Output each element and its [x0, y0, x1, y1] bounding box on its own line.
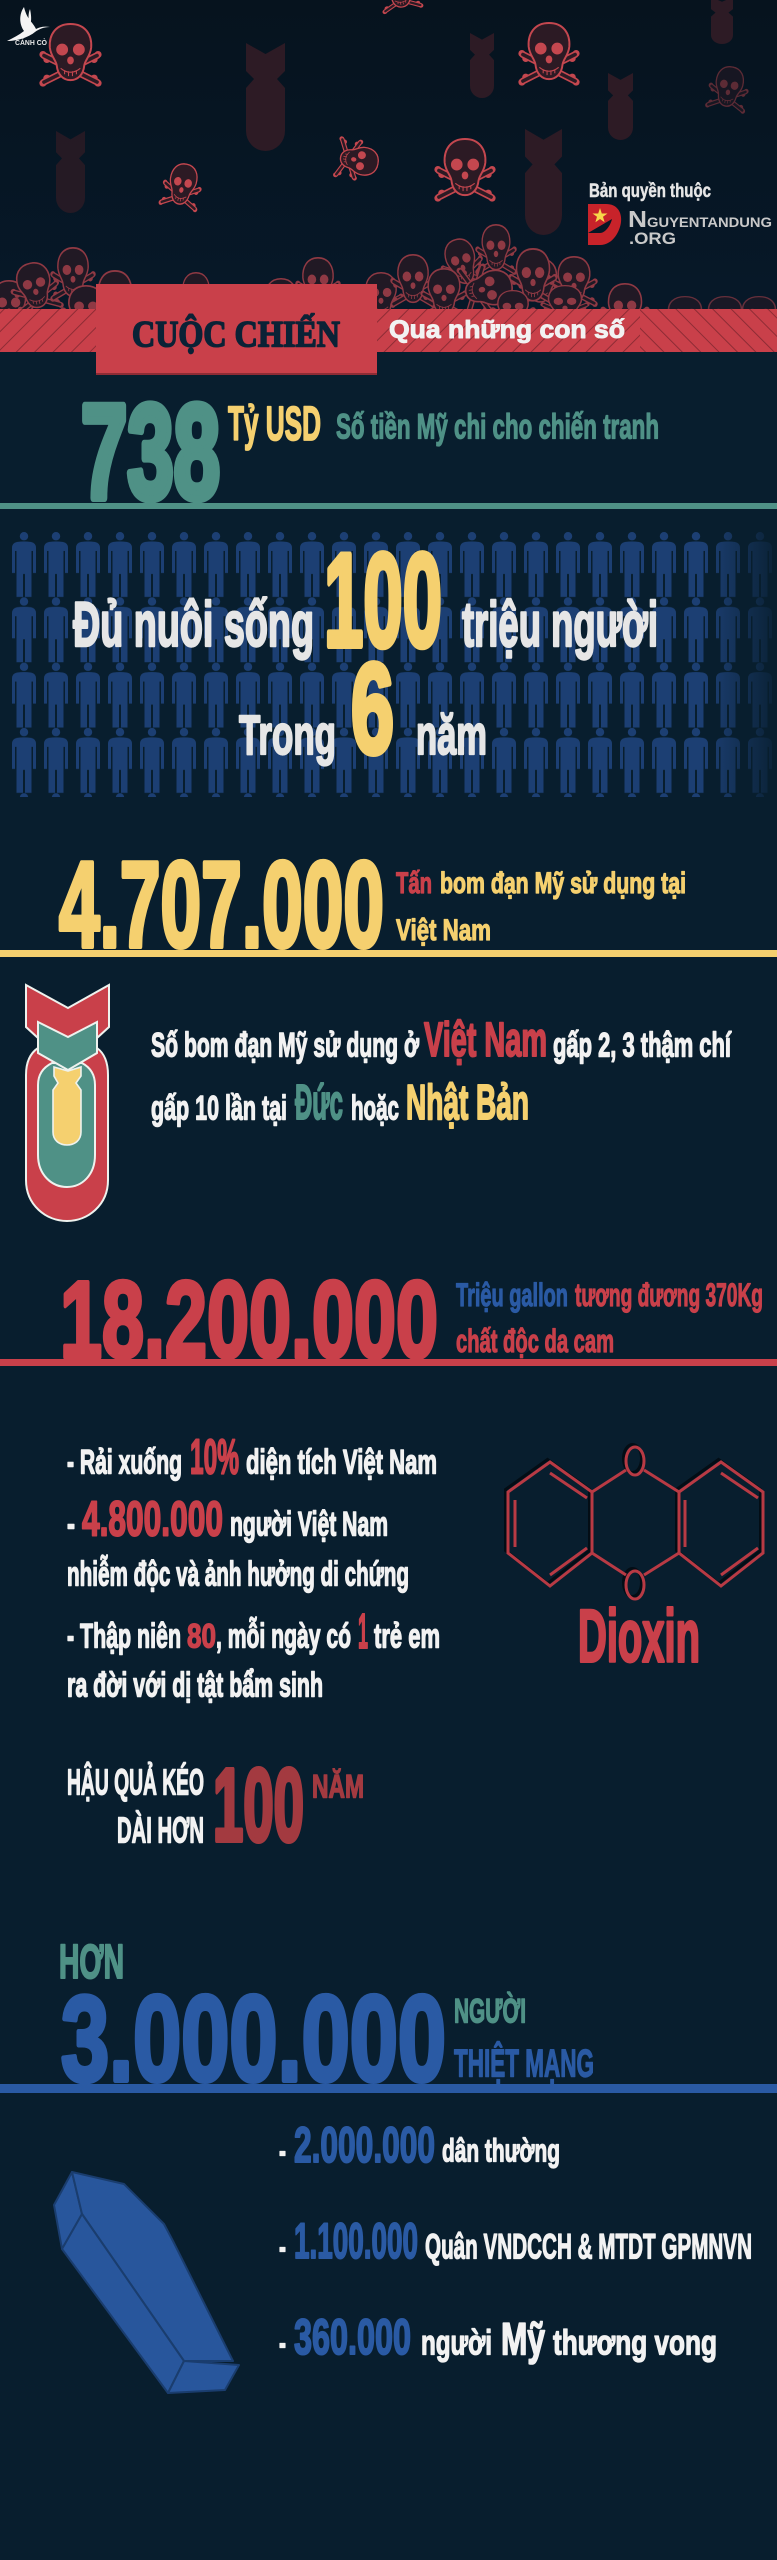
big number: 4.707.000 — [59, 836, 384, 972]
description: chất độc da cam — [456, 1323, 614, 1359]
text: Agent Orange effects: - Thập niên — [67, 1618, 181, 1656]
icon: red D logo with star — [588, 204, 621, 245]
icon: falling bombs — [56, 0, 733, 235]
big number: 18.200.000 — [60, 1259, 438, 1381]
unit: NGƯỜI — [454, 1992, 526, 2030]
site name — [628, 206, 772, 248]
item: civilians: 2.000.000 — [294, 2117, 435, 2173]
Cánh Cò logo — [7, 7, 50, 47]
text line 2 — [239, 638, 487, 781]
description: Triệu gallon — [456, 1277, 568, 1313]
callout: consequences last over 100 years: NĂM — [312, 1768, 364, 1804]
stat: 18,200,000 gallons — [0, 1259, 777, 1381]
text: Agent Orange effects: ra đời với dị tật bẩm sinh — [67, 1666, 323, 1704]
description: bom đạn Mỹ sử dụng tại — [440, 867, 686, 900]
callout: consequences last over 100 years: DÀI HƠN — [117, 1810, 204, 1850]
text line 2: năm — [416, 703, 487, 766]
item: Americans: 360.000 — [294, 2309, 411, 2365]
text: comparison with Germany and Japan: hoặc — [351, 1090, 399, 1128]
text line 1 — [73, 527, 658, 675]
text: comparison with Germany and Japan: Việt Nam — [424, 1014, 547, 1067]
icon: pile of skulls — [0, 224, 776, 309]
site name: N — [628, 206, 647, 232]
text: Agent Orange effects: nhiễm độc và ảnh hưởng di chứng — [67, 1556, 409, 1594]
yellow rule — [0, 950, 777, 957]
text: comparison with Germany and Japan: Số bom đạn Mỹ sử dụng ở — [151, 1026, 420, 1064]
text: Agent Orange effects: - Rải xuống — [67, 1444, 182, 1482]
title box — [96, 284, 377, 375]
red rule — [0, 1359, 777, 1366]
text: comparison with Germany and Japan — [151, 1014, 732, 1130]
stat: 738 billion USD — [0, 378, 777, 527]
teal rule — [0, 503, 777, 509]
text: Agent Orange effects: diện tích Việt Nam — [246, 1444, 437, 1482]
callout: consequences last over 100 years: 100 — [213, 1748, 304, 1862]
item: soldiers — [279, 2213, 752, 2269]
text: Agent Orange effects: 80 — [187, 1618, 216, 1656]
text: Agent Orange effects: , mỗi ngày có — [216, 1618, 351, 1656]
item: Americans: - — [279, 2324, 286, 2361]
callout: consequences last over 100 years — [67, 1748, 364, 1862]
site name: GUYENTANDUNG — [647, 214, 772, 230]
item: Americans: thương vong — [553, 2324, 717, 2362]
people grid — [12, 532, 777, 797]
stat: 4,707,000 tons of bombs — [0, 836, 777, 972]
text: comparison with Germany and Japan: Nhật Bản — [406, 1076, 529, 1130]
title banner — [0, 284, 777, 375]
panel: feeding 100 million people — [12, 527, 777, 800]
text: Agent Orange effects: 1 — [358, 1605, 368, 1659]
copyright block — [588, 181, 772, 248]
item: Americans — [279, 2309, 717, 2365]
logo name: CÁNH CÒ — [15, 38, 48, 47]
item: soldiers: - — [279, 2228, 286, 2265]
description — [396, 867, 686, 947]
item: Americans: Mỹ — [501, 2314, 545, 2364]
text: Agent Orange effects: - — [67, 1506, 75, 1544]
item: soldiers: 1.100.000 — [294, 2213, 418, 2269]
description — [456, 1277, 763, 1359]
unit: Tỷ USD — [228, 398, 321, 451]
icon: falling skulls — [39, 0, 752, 213]
copyright caption: Bản quyền thuộc — [589, 181, 711, 202]
hatched ribbon — [0, 309, 640, 352]
item: Americans: người — [421, 2324, 492, 2362]
description: Việt Nam — [396, 914, 491, 947]
text line 2: Trong — [239, 703, 336, 766]
text: comparison with Germany and Japan: Đức — [295, 1076, 343, 1130]
description: Tấn — [396, 867, 432, 900]
text: comparison with Germany and Japan: gấp 10 lần tại — [151, 1090, 287, 1128]
list: casualty breakdown — [279, 2117, 752, 2365]
header illustration: falling bombs and skulls — [0, 0, 777, 309]
callout: consequences last over 100 years: HẬU QUẢ KÉO — [67, 1760, 204, 1802]
big number: 3.000.000 — [61, 1970, 446, 2106]
item: civilians: dân thường — [442, 2132, 560, 2168]
text: Agent Orange effects: người Việt Nam — [230, 1506, 388, 1544]
prefix: HƠN — [59, 1936, 124, 1989]
title text: CUỘC CHIẾN — [132, 312, 340, 356]
text: Agent Orange effects: 10% — [190, 1430, 239, 1484]
subtitle: Qua những con số — [389, 316, 625, 344]
text: Agent Orange effects — [67, 1430, 440, 1704]
text line 1: 100 — [324, 527, 442, 675]
icon: coffin — [54, 2172, 239, 2393]
icon: nested bombs — [26, 985, 109, 1221]
blue rule — [0, 2084, 777, 2093]
icon: dioxin molecule — [506, 1444, 763, 1599]
item: civilians: - — [279, 2132, 286, 2169]
stat: more than 3,000,000 deaths: THIỆT MẠNG — [454, 2042, 594, 2086]
stat: more than 3,000,000 deaths — [0, 1936, 777, 2106]
site name: .ORG — [629, 229, 676, 248]
text line 2: 6 — [351, 638, 394, 781]
text: Agent Orange effects: trẻ em — [374, 1618, 440, 1656]
text line 1: Đủ nuôi sống — [73, 590, 314, 660]
big number: 738 — [81, 378, 220, 527]
text: Agent Orange effects: 4.800.000 — [82, 1492, 223, 1546]
icon: white bird — [7, 7, 50, 41]
